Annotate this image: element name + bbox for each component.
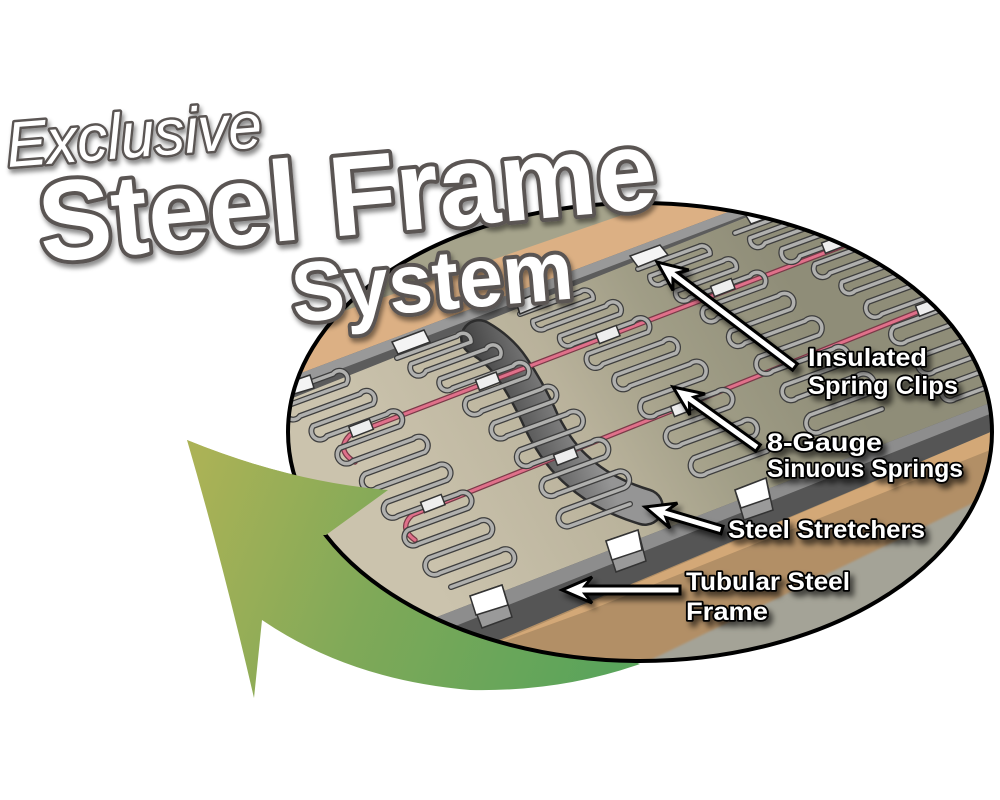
carpet area above frame (345, 206, 746, 310)
callout arrow: sinuous springs (673, 387, 760, 451)
title line: Exclusive: Exclusive (3, 89, 264, 181)
callout arrow: steel stretchers (645, 503, 723, 534)
sinuous springs (273, 207, 1000, 587)
label: insulated spring clips: Spring Clips (808, 372, 958, 400)
green curved arrow (187, 440, 640, 698)
pink spring wires (344, 245, 935, 540)
base fill (500, 562, 682, 640)
fabric seat decking (290, 218, 988, 617)
label: tubular steel frame: Tubular Steel (686, 568, 850, 596)
callout arrow: tubular steel frame (562, 577, 680, 603)
grey floor (652, 502, 972, 659)
oval cutaway illustration (286, 201, 994, 663)
title (3, 89, 662, 340)
label: steel stretchers: Steel Stretchers (728, 516, 925, 544)
label: 8-gauge sinuous springs (767, 429, 963, 483)
label: 8-gauge sinuous springs: Sinuous Springs (767, 455, 963, 483)
lower steel rail (437, 404, 990, 640)
title line: Steel Frame: Steel Frame (33, 106, 662, 287)
title line: System: System (288, 223, 577, 340)
lower rail clips (470, 478, 773, 628)
label: tubular steel frame (686, 568, 850, 626)
label: insulated spring clips (808, 344, 958, 400)
upper steel rail (294, 212, 746, 398)
label: insulated spring clips: Insulated (808, 344, 927, 372)
lower wood board (680, 442, 967, 564)
label: 8-gauge sinuous springs: 8-Gauge (767, 429, 882, 457)
upper rail clips (290, 204, 778, 394)
wire clips (349, 235, 940, 513)
upper wood board (302, 205, 728, 372)
steel stretcher tube (479, 338, 645, 507)
oval outline (288, 203, 992, 661)
label: tubular steel frame: Frame (686, 598, 768, 626)
callout arrow: insulated spring clips (657, 262, 797, 370)
green arrow barb overlapping the oval (187, 440, 388, 535)
